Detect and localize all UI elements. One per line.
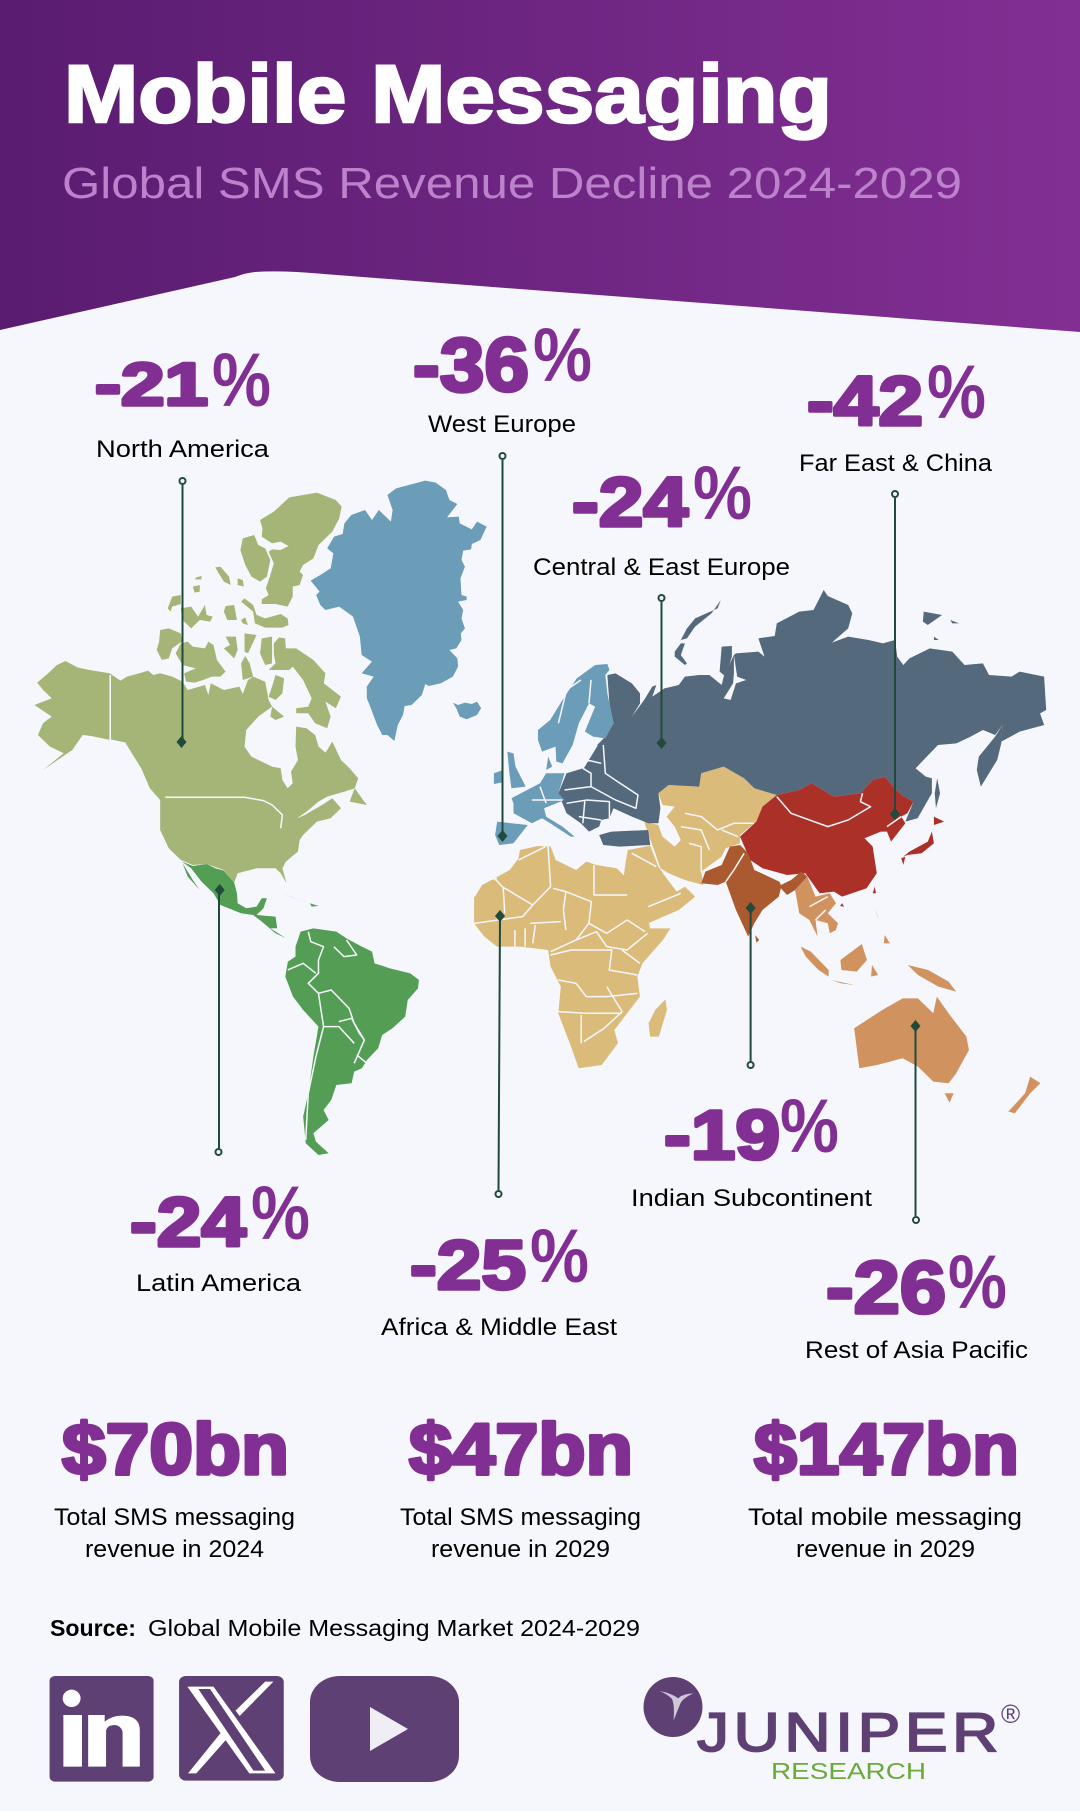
stat: North America [95,338,271,463]
map: China, Mongolia, Korea and Japan [740,777,944,907]
stat: Indian Subcontinent: % [780,1084,839,1169]
total: SMS revenue 2024: Total SMS messaging [54,1504,295,1531]
stat: Central and East Europe: -24 [572,463,688,541]
callout line: West Europe [498,453,508,842]
logo: Juniper Research: JUNIPER [697,1701,1003,1763]
total: SMS revenue 2029: $47bn [409,1410,633,1490]
header banner [0,0,1080,332]
total: SMS revenue 2024 [54,1410,295,1563]
stat: Latin America: % [251,1171,310,1256]
total: SMS revenue 2029: Total SMS messaging [400,1504,641,1531]
stat: West Europe: -36 [413,323,529,408]
total: SMS revenue 2029: revenue in 2029 [431,1536,610,1563]
total: SMS revenue 2029 [400,1410,641,1563]
total: mobile messaging revenue 2029: $147bn [754,1410,1019,1490]
icon: LinkedIn [50,1676,154,1782]
icon: YouTube [310,1676,459,1782]
callout line: North America [176,478,186,748]
stat: Rest of Asia Pacific: -26 [826,1246,946,1329]
stat: Latin America: Latin America [136,1270,302,1297]
stat: Indian Subcontinent: Indian Subcontinent [631,1185,872,1212]
stat: North America: % [212,338,271,423]
map: Central and East Europe and Russia [558,590,1046,847]
stat: Africa and Middle East [381,1214,617,1341]
map: Africa and Middle East [474,767,777,1068]
source line: Global Mobile Messaging Market 2024-2029 [148,1615,640,1641]
total: mobile messaging revenue 2029: Total mobile messaging [748,1504,1022,1531]
logo: Juniper Research: ® [1001,1699,1020,1729]
stat: West Europe: % [533,313,592,398]
stat: Far East and China [799,350,993,477]
stat: Far East and China: Far East & China [799,450,993,477]
stat: North America: North America [96,436,270,463]
stat: West Europe: West Europe [428,411,576,438]
logo: Juniper Research [644,1677,1020,1784]
stat: Indian Subcontinent: -19 [664,1096,780,1174]
stat: Africa and Middle East: Africa & Middle East [381,1314,617,1341]
stat: Rest of Asia Pacific [805,1240,1028,1364]
stat: Rest of Asia Pacific: % [948,1240,1007,1325]
title: Mobile Messaging [64,49,832,140]
stat: Central and East Europe: Central & East Europe [533,554,790,581]
icon: X [179,1676,284,1781]
stat: Latin America [130,1171,310,1297]
total: SMS revenue 2024: $70bn [62,1410,289,1490]
stat: North America: -21 [95,351,208,418]
map: Greenland and Iceland [311,481,487,741]
callout line: Rest of Asia Pacific [910,1020,920,1223]
map: Indian Subcontinent [701,845,807,943]
callout line: Indian Subcontinent [746,902,756,1068]
total: mobile messaging revenue 2029: revenue in 2029 [796,1536,975,1563]
map: Rest of Asia Pacific [795,877,1040,1113]
callout line: Far East and China [890,491,900,820]
total: SMS revenue 2024: revenue in 2024 [85,1536,264,1563]
callout line: Africa and Middle East [495,910,505,1197]
stat: Central and East Europe [533,451,790,581]
stat: Indian Subcontinent [631,1084,872,1212]
callout line: Latin America [215,884,225,1155]
stat: Rest of Asia Pacific: Rest of Asia Pacific [805,1337,1028,1364]
callout line: Central and East Europe [656,595,666,749]
stat: Far East and China: -42 [807,362,923,440]
map: West Europe [494,664,613,845]
stat: Central and East Europe: % [693,451,752,536]
map: North America [34,493,367,883]
stat: Latin America: -24 [130,1183,246,1261]
map: Latin America [182,862,419,1155]
stat: Africa and Middle East: -25 [410,1226,526,1304]
subtitle: Global SMS Revenue Decline 2024-2029 [62,159,962,208]
source line: Source: [50,1615,136,1641]
stat: West Europe [413,313,592,438]
logo: Juniper Research: RESEARCH [771,1758,926,1784]
stat: Africa and Middle East: % [530,1214,589,1299]
total: mobile messaging revenue 2029 [748,1410,1022,1563]
stat: Far East and China: % [927,350,986,435]
